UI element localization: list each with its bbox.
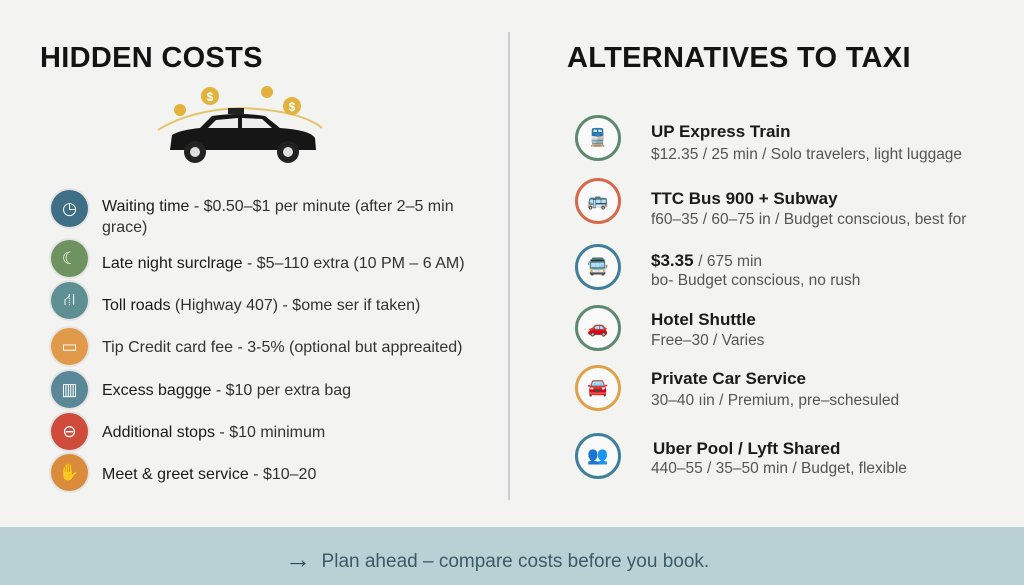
list: hidden costs: Meet & greet service - $10–20 bbox=[102, 466, 316, 483]
list: hidden costs: ⊖ bbox=[62, 422, 77, 440]
item: stops bbox=[49, 411, 325, 452]
list: hidden costs: Tip Credit card fee - 3-5% (optional but appreaited) bbox=[102, 339, 462, 356]
illustration: taxi with coins: $ bbox=[207, 90, 214, 104]
list: alternatives: 👥 bbox=[587, 446, 609, 465]
list: hidden costs: ▭ bbox=[61, 336, 78, 356]
item: late night bbox=[49, 238, 465, 279]
list: hidden costs: Waiting time - $0.50–$1 per minute (after 2–5 min grace) bbox=[102, 198, 454, 236]
list: hidden costs: ▥ bbox=[61, 380, 78, 398]
footer text with arrow: → Plan ahead – compare costs before you book. bbox=[285, 544, 709, 574]
item: toll roads bbox=[49, 280, 420, 321]
list: alternatives: Hotel Shuttle bbox=[651, 310, 756, 329]
list: alternatives: f60–35 / 60–75 in / Budget conscious, best for bbox=[651, 211, 966, 228]
item: bus bbox=[575, 244, 860, 290]
item: baggage bbox=[49, 369, 351, 410]
list: alternatives: 🚘 bbox=[587, 378, 609, 397]
item: waiting time bbox=[49, 188, 454, 236]
list: alternatives: 🚗 bbox=[587, 318, 609, 337]
list: hidden costs: ◷ bbox=[62, 198, 77, 218]
list: hidden costs: Late night surclrage - $5–110 extra (10 PM – 6 AM) bbox=[102, 255, 465, 272]
illustration: taxi with coins bbox=[158, 86, 323, 163]
list: alternatives: Uber Pool / Lyft Shared bbox=[653, 439, 840, 458]
item: meet greet bbox=[49, 452, 316, 493]
list: alternatives: Private Car Service bbox=[651, 369, 806, 388]
item: private car bbox=[575, 365, 899, 411]
list: hidden costs bbox=[49, 188, 465, 493]
list: hidden costs: Additional stops - $10 minimum bbox=[102, 424, 325, 441]
list: hidden costs: ☾ bbox=[62, 248, 77, 268]
list: alternatives: $12.35 / 25 min / Solo travelers, light luggage bbox=[651, 146, 962, 163]
list: hidden costs: Toll roads (Highway 407) - $ome ser if taken) bbox=[102, 297, 420, 314]
list: alternatives: 🚆 bbox=[587, 128, 609, 147]
list: hidden costs: ✋ bbox=[59, 462, 80, 482]
list: alternatives: 440–55 / 35–50 min / Budget, flexible bbox=[651, 460, 907, 477]
title: hidden costs: HIDDEN COSTS bbox=[40, 42, 263, 74]
item: tip bbox=[49, 326, 462, 367]
list: alternatives: Free–30 / Varies bbox=[651, 332, 764, 349]
item: UP express bbox=[575, 115, 962, 163]
title: alternatives: ALTERNATIVES TO TAXI bbox=[567, 42, 911, 74]
list: alternatives: TTC Bus 900 + Subway bbox=[651, 189, 838, 208]
footer banner bbox=[0, 527, 1024, 585]
item: uber pool bbox=[575, 433, 907, 479]
illustration: taxi with coins: $ bbox=[289, 100, 296, 114]
item: hotel shuttle bbox=[575, 305, 764, 351]
list: alternatives: bo- Budget conscious, no rush bbox=[651, 272, 860, 289]
list: alternatives: 🚌 bbox=[587, 191, 609, 210]
list: alternatives bbox=[575, 115, 966, 479]
list: alternatives: $3.35 / 675 min bbox=[651, 251, 762, 270]
list: hidden costs: ⛙ bbox=[64, 290, 75, 308]
list: alternatives: 30–40 ıin / Premium, pre–schesuled bbox=[651, 392, 899, 409]
list: hidden costs: Excess baggge - $10 per extra bag bbox=[102, 382, 351, 399]
divider line bbox=[508, 32, 510, 500]
item: TTC bus bbox=[575, 178, 966, 228]
list: alternatives: UP Express Train bbox=[651, 122, 791, 141]
list: alternatives: 🚍 bbox=[587, 257, 609, 276]
